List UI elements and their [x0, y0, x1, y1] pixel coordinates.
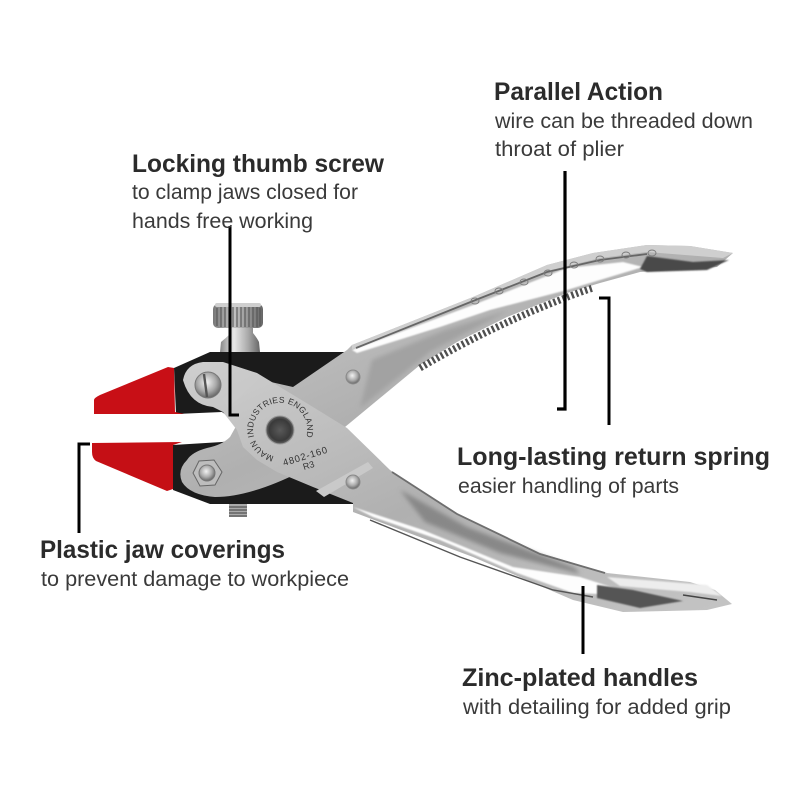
handle top rim [352, 245, 733, 349]
leader: thumb screw [230, 226, 239, 415]
callout: parallel action [494, 78, 753, 161]
callout: plastic jaw coverings: Plastic jaw coverings [40, 536, 285, 564]
callout: plastic jaw coverings [40, 536, 349, 591]
callout: return spring: easier handling of parts [458, 475, 679, 498]
shadow upper edge [392, 472, 605, 573]
callout: zinc-plated handles: Zinc-plated handles [462, 664, 698, 692]
lower handle arm with plate [183, 362, 732, 612]
leader: jaw coverings [79, 444, 90, 533]
lower rim line [370, 520, 593, 597]
callout: zinc-plated handles [462, 664, 731, 719]
icon: lower screw thread [229, 504, 247, 517]
pivot bolt [266, 416, 294, 444]
black jaw body [173, 352, 354, 504]
upper red jaw covering [94, 367, 184, 414]
callout: locking thumb screw [132, 150, 385, 233]
plate embossed bands [222, 375, 259, 408]
dark tip [640, 256, 729, 272]
pliers illustration [92, 245, 733, 612]
callout: parallel action: Parallel Action [494, 78, 663, 106]
return spring teeth [420, 288, 593, 368]
rivet upper [346, 370, 360, 384]
engraved text on plate: MAUN INDUSTRIES ENGLAND [247, 396, 314, 462]
leader: return spring [599, 298, 609, 425]
white highlight [352, 262, 643, 353]
icon: thumb screw [213, 303, 263, 352]
grip dots [471, 250, 656, 304]
white highlight [353, 507, 630, 594]
callout: return spring [457, 443, 770, 498]
rivet lower [346, 475, 360, 489]
lower red jaw covering [92, 442, 182, 491]
callout: parallel action: throat of plier [495, 138, 624, 161]
leader: handles [582, 586, 584, 654]
callout: locking thumb screw: Locking thumb screw [132, 150, 385, 178]
shadow line [356, 254, 647, 348]
callout: parallel action: wire can be threaded down [494, 110, 753, 133]
callout: plastic jaw coverings: to prevent damage to workpiece [41, 568, 349, 591]
engraved text on plate: 4802-160 [282, 445, 329, 469]
dark tip [597, 585, 683, 608]
callout: zinc-plated handles: with detailing for added grip [462, 696, 731, 719]
engraved text on plate: R3 [302, 459, 316, 472]
slotted screw upper jaw [195, 372, 221, 398]
hex nut lower jaw [193, 460, 222, 486]
textured shade [360, 310, 510, 408]
callout: locking thumb screw: to clamp jaws closed for [132, 181, 358, 204]
upper handle arm [180, 245, 733, 497]
leader: parallel action [557, 171, 565, 409]
callout: return spring: Long-lasting return spring [457, 443, 770, 471]
callout: locking thumb screw: hands free working [132, 210, 313, 233]
textured band [400, 490, 580, 574]
